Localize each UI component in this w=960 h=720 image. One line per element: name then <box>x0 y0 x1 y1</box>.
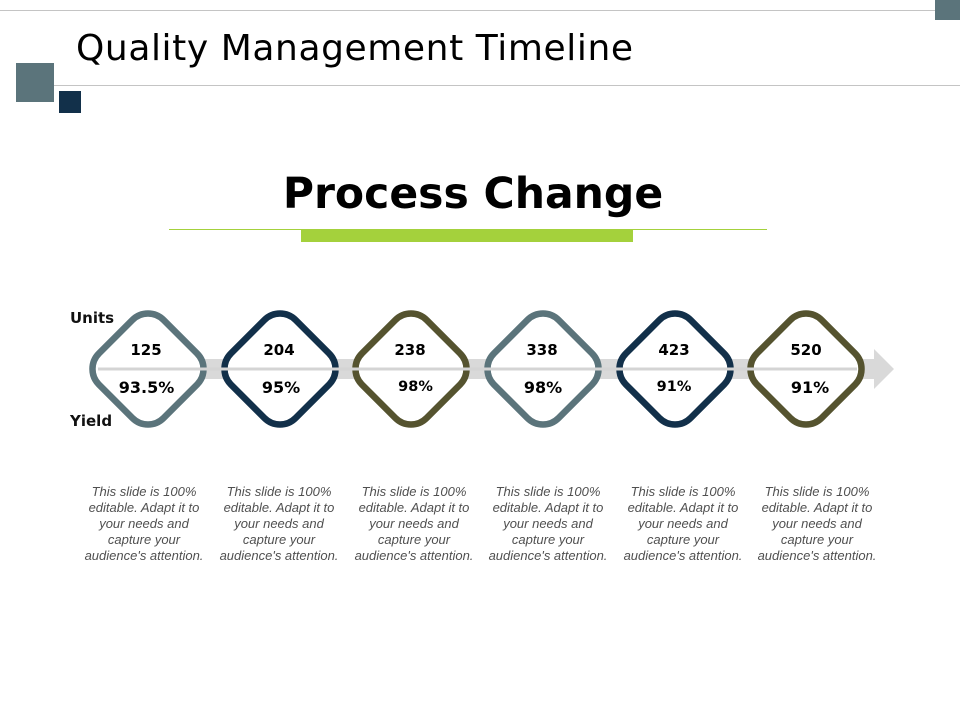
title: Quality Management Timeline <box>76 28 633 69</box>
milestone 6 diamond: 91% <box>791 378 829 397</box>
text block 1: capture your <box>108 532 181 547</box>
milestone 3 diamond: 238 <box>394 341 426 359</box>
text block 4: This slide is 100% <box>496 484 600 499</box>
text block 1: editable. Adapt it to <box>89 500 199 515</box>
text block 4: audience's attention. <box>489 548 607 563</box>
text block 6: This slide is 100% <box>765 484 869 499</box>
icon: small square <box>59 91 81 113</box>
text block 3 <box>355 484 473 563</box>
text block 4: your needs and <box>502 516 594 531</box>
heading: Process Change: Process Change <box>283 170 663 219</box>
milestone 5 diamond: 423 <box>658 341 690 359</box>
text block 2: capture your <box>243 532 316 547</box>
text block 3: your needs and <box>368 516 460 531</box>
text block 5: capture your <box>647 532 720 547</box>
text block 4: editable. Adapt it to <box>493 500 603 515</box>
heading underline <box>169 229 767 242</box>
text block 1: audience's attention. <box>85 548 203 563</box>
text block 6: audience's attention. <box>758 548 876 563</box>
text block 6: editable. Adapt it to <box>762 500 872 515</box>
text block 3: editable. Adapt it to <box>359 500 469 515</box>
milestone 1 diamond <box>83 304 213 434</box>
milestone 2 diamond <box>215 304 345 434</box>
text block 1 <box>85 484 203 563</box>
text block 5: This slide is 100% <box>631 484 735 499</box>
text block 2: This slide is 100% <box>227 484 331 499</box>
milestone 6 diamond <box>741 304 871 434</box>
text block 5: your needs and <box>637 516 729 531</box>
milestone 5 diamond <box>610 304 740 434</box>
milestone 4 diamond: 98% <box>524 378 562 397</box>
milestone 3 diamond: 98% <box>398 379 433 395</box>
text block 5 <box>624 484 742 563</box>
text block 2: audience's attention. <box>220 548 338 563</box>
text block 4 <box>489 484 607 563</box>
text block 6: capture your <box>781 532 854 547</box>
arrow: timeline <box>200 349 894 389</box>
milestone 3 diamond <box>346 304 476 434</box>
label: Units: Units <box>70 309 114 327</box>
text block 1: your needs and <box>98 516 190 531</box>
text block 3: This slide is 100% <box>362 484 466 499</box>
label: Yield: Yield <box>69 412 112 430</box>
text block 2: your needs and <box>233 516 325 531</box>
milestone 6 diamond: 520 <box>790 341 822 359</box>
text block 4: capture your <box>512 532 585 547</box>
text block 2 <box>220 484 338 563</box>
milestone 2 diamond: 95% <box>262 378 300 397</box>
milestone 1 diamond: 125 <box>130 341 162 359</box>
milestone 1 diamond: 93.5% <box>119 378 174 397</box>
milestone 4 diamond: 338 <box>526 341 558 359</box>
text block 1: This slide is 100% <box>92 484 196 499</box>
milestone 2 diamond: 204 <box>263 341 295 359</box>
text block 6: your needs and <box>771 516 863 531</box>
milestone 5 diamond: 91% <box>657 379 692 395</box>
text block 3: audience's attention. <box>355 548 473 563</box>
milestone 4 diamond <box>478 304 608 434</box>
text block 5: audience's attention. <box>624 548 742 563</box>
text block 6 <box>758 484 876 563</box>
icon: top right square <box>935 0 960 20</box>
text block 2: editable. Adapt it to <box>224 500 334 515</box>
text block 5: editable. Adapt it to <box>628 500 738 515</box>
icon: large square <box>16 63 54 102</box>
text block 3: capture your <box>378 532 451 547</box>
